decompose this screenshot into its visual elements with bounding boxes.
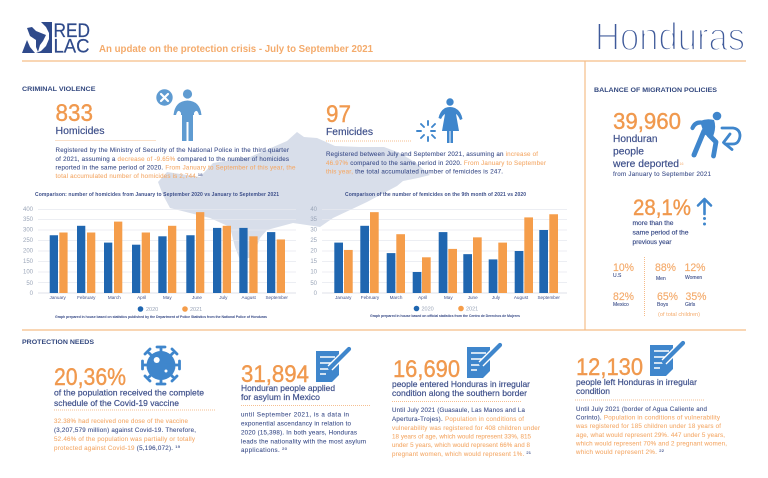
women: Women [685, 275, 702, 281]
men [655, 262, 676, 282]
y axis labels: 30 [310, 228, 318, 234]
month labels: May [444, 295, 453, 300]
stat: deported [612, 108, 712, 178]
stat: femicides: 97 [326, 101, 351, 128]
month labels: January [335, 295, 352, 300]
month labels: February [361, 295, 380, 300]
y axis labels: 50 [26, 281, 34, 287]
stat: homicides: 833 [56, 100, 93, 127]
destination: Mexico: 82% [613, 291, 634, 303]
y axis labels: 150 [23, 259, 34, 265]
text block: homicides: 18 [198, 172, 203, 177]
month labels: August [514, 295, 529, 300]
grid lines [322, 210, 567, 293]
month labels: September [265, 295, 288, 300]
icon: document and pen, people left [650, 343, 683, 376]
month labels: August [242, 295, 257, 300]
women [684, 262, 706, 281]
stat: homicides: Homicides [56, 126, 104, 137]
month labels: July [492, 295, 501, 300]
month labels: March [390, 295, 403, 300]
women: 12% [684, 262, 706, 274]
icon: document and pen, southern border [467, 345, 500, 378]
card: people left Honduras: Corinto). Population in conditions of vulnerability [576, 414, 721, 422]
bars 2021 [59, 212, 285, 293]
destination: U.S.: U.S [613, 273, 622, 279]
card: vaccine: schedule of the Covid-19 vaccine [54, 398, 179, 408]
month labels: February [77, 295, 96, 300]
card: vaccine: 20,36% [54, 364, 126, 391]
y axis labels [23, 207, 34, 297]
month labels: September [537, 295, 560, 300]
stat: 28,1% increase: more than the [632, 220, 674, 227]
card: asylum applications: 31,894 [241, 361, 309, 388]
card: asylum applications: applications. [241, 447, 280, 454]
logo: RedLAC [22, 20, 90, 58]
card: asylum applications: for asylum in Mexico [241, 392, 320, 402]
y axis labels: 20 [310, 248, 318, 254]
y axis labels: 0 [30, 291, 34, 297]
card: people left Honduras [575, 354, 727, 456]
card: people left Honduras: 12,130 [576, 354, 643, 381]
icon: up arrow [698, 199, 711, 226]
month labels [335, 295, 560, 300]
y axis labels: 35 [310, 217, 318, 223]
card: vaccine [54, 364, 215, 452]
card: vaccine: of the population received the complete [54, 388, 204, 398]
legend: 2020 [422, 306, 434, 312]
stat: 28,1% increase: previous year [632, 239, 672, 246]
card: people left Honduras: was registered for 185 children under 18 years of [575, 423, 721, 430]
girls [685, 291, 707, 308]
card: vaccine: 52.46% of the population was partially or totally [54, 436, 196, 443]
section heading: criminal violence: CRIMINAL VIOLENCE [22, 86, 96, 93]
background map of Honduras [158, 132, 430, 260]
men: 88% [655, 262, 676, 274]
card: people entered Honduras [392, 356, 540, 458]
card: people left Honduras: which would represent 2%. [575, 449, 657, 456]
card: people left Honduras: which would represent 70% and 2 pregnant women, [575, 440, 727, 448]
chart: femicides [310, 192, 567, 318]
card: asylum applications: leads the nationality with the most asylum [241, 438, 366, 445]
boys [657, 291, 678, 308]
legend [138, 306, 202, 313]
y axis labels: 350 [23, 217, 34, 223]
bars 2021 [344, 212, 558, 293]
card: people left Honduras: 22 [659, 448, 665, 453]
bars 2020 [50, 226, 275, 293]
y axis labels: 50 [310, 281, 318, 287]
y axis labels: 100 [23, 270, 34, 276]
card: people left Honduras: Until July 2021 (border of Agua Caliente and [576, 406, 708, 413]
month labels: April [137, 295, 146, 300]
legend: 2021 [466, 306, 478, 312]
stat: femicides [326, 101, 411, 141]
y axis labels: 40 [310, 207, 318, 213]
y axis labels: 10 [310, 270, 318, 276]
y axis labels: 250 [23, 238, 34, 244]
logo: RedLAC: RED [54, 20, 90, 42]
country title: Honduras [595, 16, 745, 59]
card: people entered Honduras: people entered Honduras in irregular [392, 379, 530, 389]
month labels: June [468, 295, 478, 300]
stat: homicides [56, 100, 156, 140]
text block: femicides: this year, the total accumulated number of femicides is 247. [326, 168, 503, 176]
chart source: Graph prepared in house based on official statistics from the Centro de Derechos de Mujeres [370, 314, 520, 318]
text block: femicides: 46.97% compared to the same period in 2020. From January to September [326, 160, 546, 167]
destination: Mexico: Mexico [613, 302, 629, 308]
card: people entered Honduras: Until July 2021 (Guasaule, Las Manos and La [392, 407, 526, 414]
text block: homicides: of 2021, assuming a decrease of -9.65% compared to the number of homicides [56, 156, 289, 163]
month labels: May [163, 295, 172, 300]
card: people entered Honduras: condition along the southern border [392, 388, 527, 398]
icon: woman with burst [417, 98, 462, 143]
text block: homicides: Registered by the Ministry of Security of the National Police in the third quarter [56, 147, 289, 154]
chart: homicides [23, 192, 296, 319]
note: of total children: (of total children) [658, 312, 700, 318]
stat: 28,1% increase [632, 195, 691, 246]
card: people entered Honduras: under 5 years, which would represent 66% and 8 [392, 442, 531, 449]
card: people entered Honduras: vulnerability was registered for 408 children under [392, 425, 540, 432]
stat: femicides: Femicides [326, 127, 373, 138]
icon: virus [142, 347, 180, 384]
card: asylum applications: exponential ascendancy in relation to [241, 421, 352, 428]
card: asylum applications: until September 2021, is a data in [241, 412, 350, 419]
legend: 2020 [146, 307, 158, 313]
men: Men [656, 276, 666, 282]
stat: deported: Honduran [613, 134, 658, 145]
card: asylum applications: 2020 (15,398). In both years, Honduras [241, 429, 357, 436]
text block: femicides [326, 151, 546, 176]
stat: deported: from January to September 2021 [613, 171, 712, 178]
section heading: protection needs: PROTECTION NEEDS [22, 339, 94, 346]
month labels: April [418, 295, 427, 300]
card: vaccine: (3,207,579 million) against Covid-19. Therefore, [54, 427, 196, 434]
legend: 2021 [190, 307, 202, 313]
stat: deported: 39,960 [613, 108, 681, 134]
y axis labels [310, 207, 318, 297]
header rules [22, 61, 746, 330]
chart title: femicides: Comparison of the number of femicides on the 9th month of 2021 vs 2020 [345, 192, 526, 198]
chart title: homicides: Comparison: number of homicides from January to September 2020 vs January to September 2021 [35, 192, 279, 198]
card: people entered Honduras: pregnant women, which would represent 1%. [392, 451, 524, 458]
text block: homicides: total accumulated number of homicides is 2,744. [56, 173, 198, 180]
card: people left Honduras: people left Honduras in irregular [576, 377, 697, 387]
text block: homicides: reported in the same period of 2020. From January to September of this year, the [56, 164, 296, 172]
icon: document and pen, asylum [316, 349, 349, 382]
card: asylum applications: Honduran people applied [241, 383, 335, 393]
logo: RedLAC: LAC [54, 36, 90, 58]
month labels [50, 295, 288, 300]
boys: 65% [657, 291, 678, 303]
text block: homicides [56, 147, 296, 180]
y axis labels: 0 [314, 291, 318, 297]
girls: 35% [686, 291, 707, 303]
card: people entered Honduras: 18 years of age, which would represent 33%, 815 [392, 434, 532, 440]
card: vaccine: protected against Covid-19 (5,196,072). [54, 445, 173, 452]
month labels: January [50, 295, 67, 300]
destination: U.S. [613, 262, 634, 279]
y axis labels: 25 [310, 238, 318, 244]
y axis labels: 15 [310, 259, 318, 265]
month labels: July [219, 295, 228, 300]
text block: femicides: Registered between July and September 2021, assuming an increase of [326, 151, 538, 158]
icon: deported runner with return arrow [692, 112, 740, 156]
card: asylum applications [241, 361, 370, 454]
boys: Boys [657, 302, 669, 308]
destination: U.S.: 10% [613, 262, 634, 274]
icon: person with cross [156, 89, 202, 141]
stat: 28,1% increase: same period of the [632, 230, 689, 236]
stat: 28,1% increase: 28,1% [633, 195, 691, 220]
grid lines [38, 210, 296, 293]
stat: deported: were deported [612, 159, 679, 170]
bars 2020 [334, 226, 548, 293]
section heading: balance of migration policies: BALANCE OF MIGRATION POLICIES [594, 87, 717, 94]
girls: Girls [685, 302, 696, 308]
header subtitle: An update on the protection crisis - July to September 2021 [99, 43, 373, 55]
card: people entered Honduras: 16,690 [393, 356, 460, 383]
card: people entered Honduras: Apertura-Trojes). Population in conditions of [392, 416, 524, 423]
chart source: Graph prepared in house based on statistics published by the Department of Police Statistics from the National Police of Honduras [55, 315, 267, 319]
card: people entered Honduras: 21 [526, 450, 532, 455]
legend [414, 306, 478, 312]
month labels: June [192, 295, 202, 300]
y axis labels: 400 [23, 207, 34, 213]
month labels: March [108, 295, 121, 300]
y axis labels: 200 [23, 248, 34, 254]
stat: deported: 16 [680, 162, 683, 166]
card: vaccine: 19 [175, 444, 181, 449]
deportation breakdown [613, 257, 707, 318]
y axis labels: 300 [23, 228, 34, 234]
destination: Mexico [613, 291, 634, 308]
stat: deported: people [613, 146, 644, 158]
card: asylum applications: 20 [282, 446, 288, 451]
card: vaccine: 32.38% had received one dose of the vaccine [54, 418, 189, 425]
card: people left Honduras: condition [576, 386, 610, 396]
card: people left Honduras: age, what would represent 29%. 447 under 5 years, [576, 432, 725, 439]
